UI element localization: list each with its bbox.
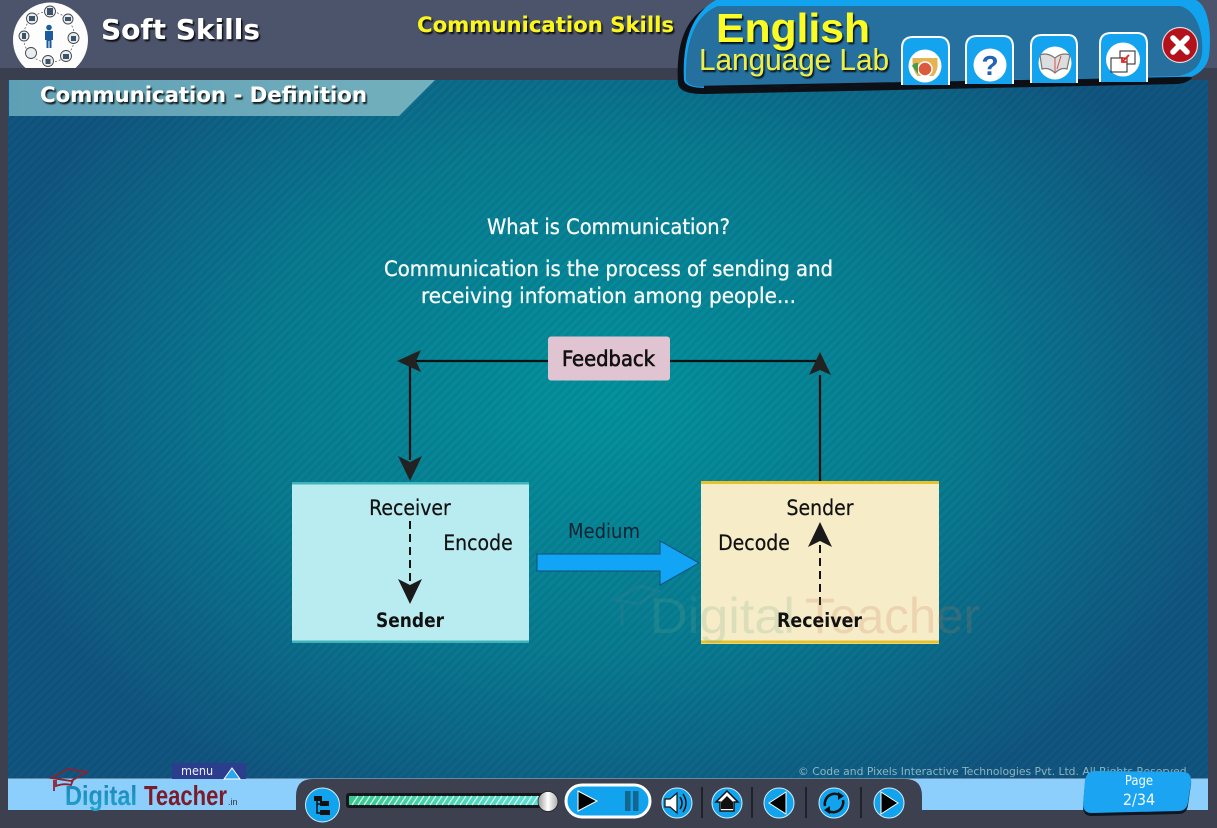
copyright: © Code and Pixels Interactive Technologies Pvt. Ltd. All Rights Reserved.: [798, 765, 1190, 778]
button: close: [1162, 28, 1198, 62]
heading: Communication Skills: Communication Skills: [417, 13, 674, 37]
branding panel: English Language Lab: [678, 0, 1210, 94]
dashed arrow up: [808, 522, 832, 605]
button: previous: [764, 788, 794, 818]
banner heading: Communication - Definition: [40, 83, 367, 108]
page counter: [1083, 771, 1191, 816]
watermark: Digital: [650, 588, 795, 644]
logo text: Digital: [65, 780, 137, 811]
button: menu: menu: [181, 763, 213, 778]
text: definition: [384, 257, 833, 309]
button: volume: [662, 788, 692, 818]
text Sender bold: Sender: [376, 609, 444, 632]
arrow: medium: [537, 541, 699, 585]
text: definition: Communication is the process of sending and: [384, 257, 833, 282]
button: window tab: [1100, 33, 1147, 82]
text Receiver bold: Receiver: [777, 609, 862, 632]
watermark: [615, 586, 980, 644]
text Encode: Encode: [443, 531, 513, 555]
brand text English: English: [716, 5, 870, 51]
title banner: [9, 80, 435, 116]
slider knob: [538, 792, 558, 812]
icon: soft skills logo: [13, 2, 88, 68]
dashed arrow down: [398, 521, 422, 604]
button: outline tree: [306, 788, 340, 822]
footer strip: [0, 778, 1217, 828]
text Sender: Sender: [786, 496, 854, 520]
logo: Digital Teacher: [51, 769, 238, 811]
heading: Soft Skills: Soft Skills: [101, 13, 260, 46]
logo: Digital Teacher: .in: [228, 797, 238, 807]
text Decode: Decode: [718, 531, 790, 555]
button: bookmark clock tab: [902, 37, 949, 85]
button: help tab: ?: [981, 50, 999, 81]
button: book tab: [1031, 35, 1077, 83]
label: Medium: Medium: [568, 519, 640, 543]
watermark: Teacher: [805, 588, 980, 644]
text: question: What is Communication?: [487, 215, 730, 240]
label: Feedback: [548, 336, 670, 380]
button: play and pause: [566, 785, 650, 817]
brand text Language Lab: Language Lab: [699, 42, 889, 77]
arrow left: [397, 350, 421, 372]
diagram: feedback loop lines and arrows: [397, 350, 831, 481]
divider: [702, 787, 861, 818]
icon: graduation cap: [51, 769, 87, 791]
button: replay: [819, 788, 849, 818]
arrow down: [398, 456, 422, 481]
text Receiver: Receiver: [369, 496, 451, 520]
arrow up: [809, 352, 831, 375]
button: home: [712, 788, 742, 818]
label: Feedback: Feedback: [562, 347, 655, 371]
page label: Page: [1125, 774, 1153, 789]
page number: 2/34: [1123, 790, 1155, 809]
panel: encode box: [292, 482, 529, 643]
logo: Digital Teacher: Teacher: [144, 780, 227, 811]
top header bar: [0, 0, 1217, 68]
button: help tab: [966, 36, 1013, 84]
text: definition: receiving infomation among people...: [421, 284, 796, 309]
media control panel: [296, 779, 922, 811]
progress bar: [346, 792, 558, 812]
panel: decode box: [701, 481, 939, 644]
button: menu: [172, 763, 246, 779]
button: next: [874, 788, 904, 818]
